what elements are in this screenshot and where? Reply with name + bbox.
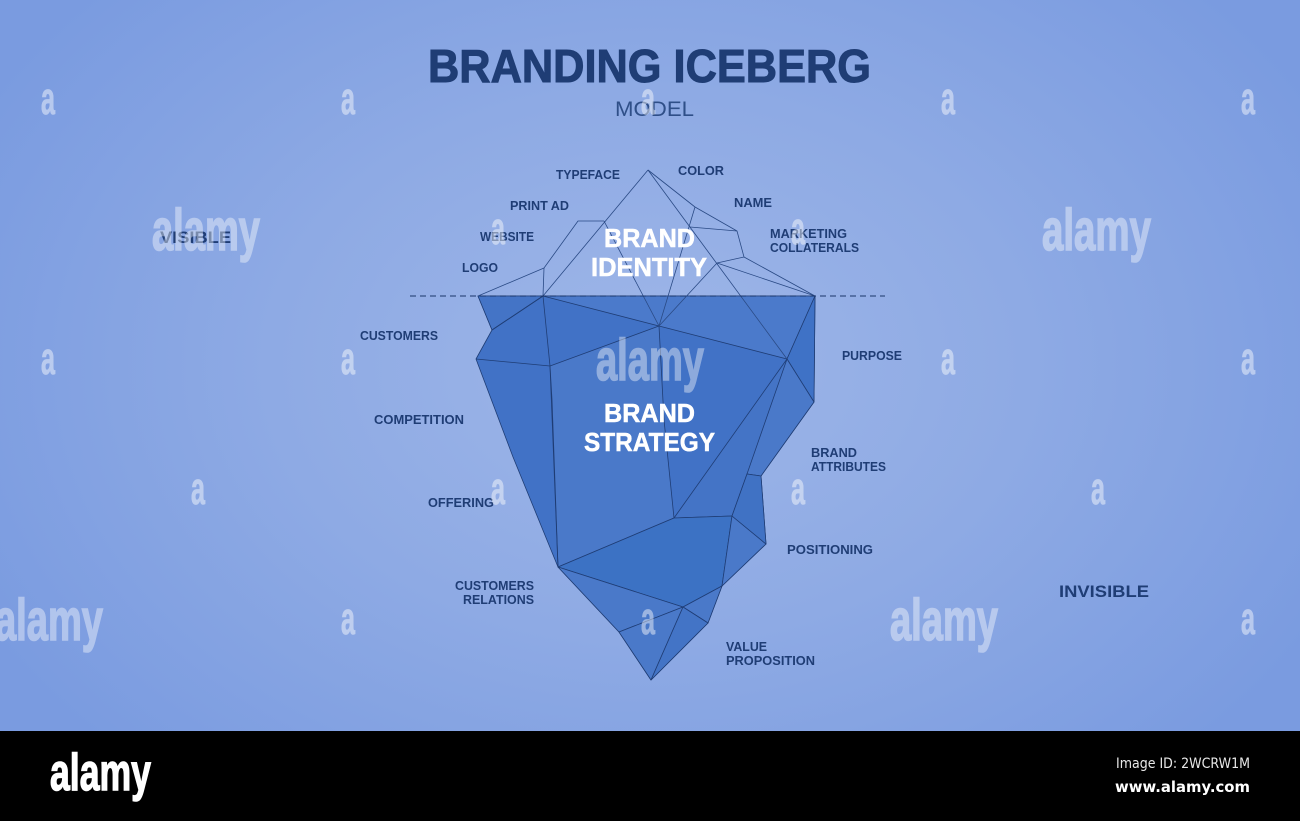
labels: visible elements: COLOR bbox=[678, 164, 724, 178]
iceberg bbox=[410, 170, 885, 680]
watermarks: alamy bbox=[890, 588, 998, 653]
watermarks: a bbox=[41, 333, 56, 384]
labels: visible elements bbox=[462, 164, 859, 275]
labels: invisible elements: VALUE bbox=[726, 640, 767, 654]
watermarks: a bbox=[41, 73, 56, 124]
labels: invisible elements: PURPOSE bbox=[842, 349, 902, 363]
labels: visible elements: LOGO bbox=[462, 261, 498, 275]
labels: invisible elements: PROPOSITION bbox=[726, 654, 815, 668]
watermarks: a bbox=[641, 73, 656, 124]
labels: invisible elements: ATTRIBUTES bbox=[811, 460, 886, 474]
watermarks: alamy bbox=[1042, 198, 1151, 263]
label: visible: VISIBLE bbox=[160, 228, 231, 247]
website: www.alamy.com bbox=[1115, 778, 1250, 796]
watermarks: a bbox=[491, 203, 506, 254]
watermarks: a bbox=[1091, 463, 1106, 514]
watermarks: a bbox=[941, 73, 956, 124]
labels: invisible elements: OFFERING bbox=[428, 496, 494, 510]
watermarks: a bbox=[1241, 73, 1256, 124]
labels: invisible elements bbox=[360, 329, 902, 668]
labels: visible elements: NAME bbox=[734, 196, 772, 210]
footer bar bbox=[0, 731, 1300, 821]
watermarks bbox=[0, 73, 1256, 653]
watermarks: alamy bbox=[152, 198, 260, 263]
labels: invisible elements: POSITIONING bbox=[787, 543, 873, 557]
waterline bbox=[410, 295, 885, 297]
watermarks: a bbox=[1241, 333, 1256, 384]
heading: brand strategy: BRAND bbox=[604, 398, 695, 428]
label: invisible: INVISIBLE bbox=[1059, 582, 1149, 601]
underwater body bbox=[476, 296, 815, 680]
labels: invisible elements: CUSTOMERS bbox=[360, 329, 438, 343]
watermarks: a bbox=[191, 463, 206, 514]
watermarks: a bbox=[641, 593, 656, 644]
heading: brand identity: IDENTITY bbox=[591, 252, 707, 282]
labels: invisible elements: RELATIONS bbox=[463, 593, 534, 607]
heading: brand strategy: STRATEGY bbox=[584, 427, 715, 457]
footer logo: alamy bbox=[50, 744, 151, 802]
subtitle: MODEL bbox=[615, 98, 694, 121]
watermarks: a bbox=[941, 333, 956, 384]
heading: brand identity: BRAND bbox=[604, 223, 695, 253]
watermarks: a bbox=[491, 463, 506, 514]
labels: visible elements: TYPEFACE bbox=[556, 168, 620, 182]
watermarks: a bbox=[341, 333, 356, 384]
image id: Image ID: 2WCRW1M bbox=[1116, 756, 1250, 772]
watermarks: alamy bbox=[596, 328, 704, 393]
labels: visible elements: COLLATERALS bbox=[770, 241, 859, 255]
heading: brand strategy bbox=[584, 398, 715, 457]
watermarks: a bbox=[341, 593, 356, 644]
visible tip outlines bbox=[478, 170, 815, 359]
labels: invisible elements: COMPETITION bbox=[374, 413, 464, 427]
heading: brand identity bbox=[591, 223, 707, 282]
labels: invisible elements: CUSTOMERS bbox=[455, 579, 534, 593]
labels: visible elements: MARKETING bbox=[770, 227, 847, 241]
watermarks: a bbox=[341, 73, 356, 124]
labels: visible elements: WEBSITE bbox=[480, 230, 534, 244]
watermarks: a bbox=[791, 463, 806, 514]
labels: invisible elements: BRAND bbox=[811, 446, 857, 460]
labels: visible elements: PRINT AD bbox=[510, 199, 569, 213]
title: BRANDING ICEBERG bbox=[428, 40, 871, 92]
watermarks: a bbox=[791, 203, 806, 254]
watermarks: a bbox=[1241, 593, 1256, 644]
